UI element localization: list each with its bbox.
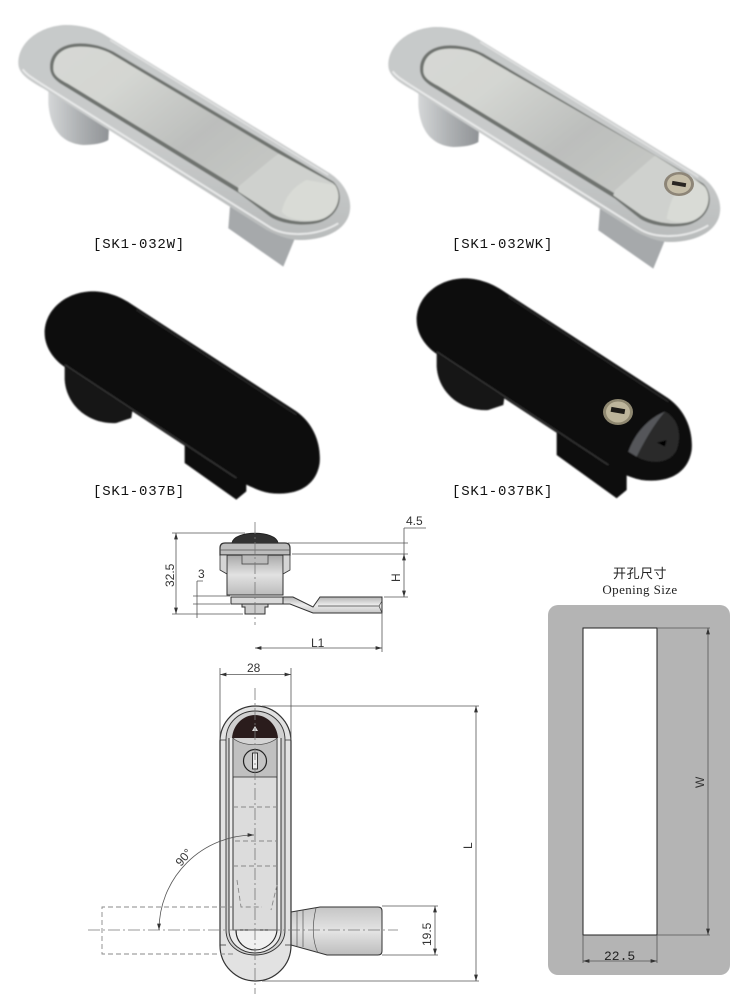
dimension: 19.5 [382,906,438,955]
dimension: 32.5: 32.5 [163,563,177,587]
technical drawing: front view [220,706,382,981]
dark top cap [232,715,278,738]
centre line: side view [254,522,256,625]
dimension: W [657,628,710,935]
product photo: silver handle with key SK1-032WK [388,27,720,269]
label: SK1-032WK: [SK1-032WK] [452,237,553,253]
label: SK1-037B: [SK1-037B] [93,484,185,500]
icon: black handle lock cylinder [603,399,633,425]
body [227,555,283,595]
flange [220,543,290,555]
dimension: 90 degree arc [159,835,254,930]
washer [231,597,283,604]
heading: opening size: Opening Size [602,582,678,597]
heading: opening size: 开孔尺寸 [613,566,667,581]
slot [242,555,268,564]
key circle [244,750,266,772]
icon: silver lock cylinder [664,172,694,196]
dimension: H [384,554,408,597]
dimension: 3 [193,567,230,618]
dimension: L1: L1 [311,636,325,650]
product photo: black handle with key SK1-037BK [417,278,692,498]
dimension: 22.5: 22.5 [604,949,635,964]
cut-out [583,628,657,935]
centre lines: front view [88,688,398,994]
dimension: H: H [389,573,403,582]
panel: opening size diagram [548,605,730,975]
dimension: L1 [255,613,382,652]
rotated lever (solid) [291,907,382,955]
lock cap [232,533,278,543]
key section [233,738,277,777]
dimension: 28: 28 [247,661,261,675]
dimension: 4.5: 4.5 [406,514,423,528]
dimension: 19.5: 19.5 [420,922,434,946]
bottom well [236,930,277,950]
heading: opening size [602,566,678,597]
product photo: silver handle SK1-032W [18,25,350,267]
label: SK1-032W: [SK1-032W] [93,237,185,253]
side clips [220,555,290,574]
plate [233,738,277,930]
nut [242,604,268,614]
triangle on cap [252,726,258,731]
technical drawing: side view [220,533,382,614]
cam arm [283,597,382,613]
dimension: W: W [693,776,707,788]
outer escutcheon [220,706,291,981]
hidden lever dashed lines [102,807,277,954]
dimension: L: L [461,842,475,849]
product photo: black handle SK1-037B [45,291,320,500]
dimension: 32.5 [163,533,245,614]
inner recess [226,711,285,955]
dimension: 28 [220,661,291,740]
dimension: 90 degree arc: 90° [173,846,195,869]
dimension: L [262,706,479,981]
dimension: 4.5 [288,514,426,556]
dimension: 22.5 [583,935,657,964]
dimension: 3: 3 [198,567,205,581]
label: SK1-037BK: [SK1-037BK] [452,484,553,500]
